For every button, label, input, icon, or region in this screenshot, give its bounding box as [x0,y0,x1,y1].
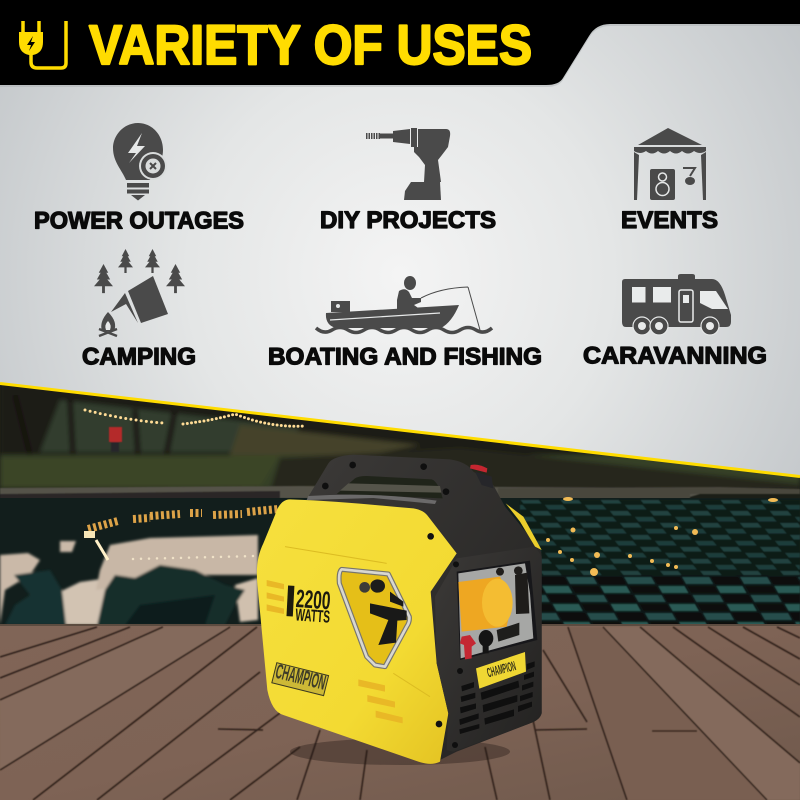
header banner [0,0,800,87]
use: events [621,128,718,234]
icon: cordless drill [366,128,450,200]
icon: plug with cord [19,21,66,68]
tree line and lawn [0,380,800,490]
use: power outages [34,123,244,234]
icon: person fishing in a boat [316,276,492,332]
use: DIY projects [320,128,496,234]
wattage badge [286,585,331,627]
champion logo [272,660,329,696]
front vents [452,561,535,748]
use: caravanning [583,274,767,370]
icon: tent, trees and campfire [94,249,185,336]
side vents [267,580,403,723]
recessed carry grip [339,569,409,667]
lantern reflections [88,509,278,529]
orange socket [458,577,512,632]
yellow diagonal line [0,384,800,476]
generator product: CHAMPION [273,660,328,695]
title: VARIETY OF USES [89,13,532,76]
label: power outages: POWER OUTAGES [34,208,244,234]
wattage badge: 2200 [295,585,331,615]
icon: event gazebo with speaker [634,128,706,200]
icon: light bulb with cross [113,123,167,200]
grey backdrop panel [0,0,800,476]
yellow side sliver [506,503,542,550]
string lights [85,410,305,426]
photo background: pool at dusk on a wooden deck [0,370,800,800]
yellow side panel [257,499,457,764]
light sky reflection [0,535,258,626]
pool water [0,497,800,626]
park visitor in red [109,427,122,452]
black corner panel [435,547,542,752]
label: camping: CAMPING [82,344,196,370]
switches [497,623,519,642]
pool edge [0,486,800,502]
product label: CHAMPION [485,658,517,680]
wooden deck [0,624,800,800]
black housing and handle [307,455,542,760]
label: boating and fishing: BOATING AND FISHING [268,344,542,370]
product label [476,652,526,689]
label: events: EVENTS [621,207,718,234]
use: camping [82,249,196,370]
use: boating and fishing [268,276,542,370]
icon: motorhome [622,274,731,335]
label: caravanning: CARAVANNING [583,342,767,370]
wattage badge: WATTS [295,604,331,627]
generator product [257,455,542,765]
label: DIY projects: DIY PROJECTS [320,207,496,234]
control panel [457,561,537,660]
